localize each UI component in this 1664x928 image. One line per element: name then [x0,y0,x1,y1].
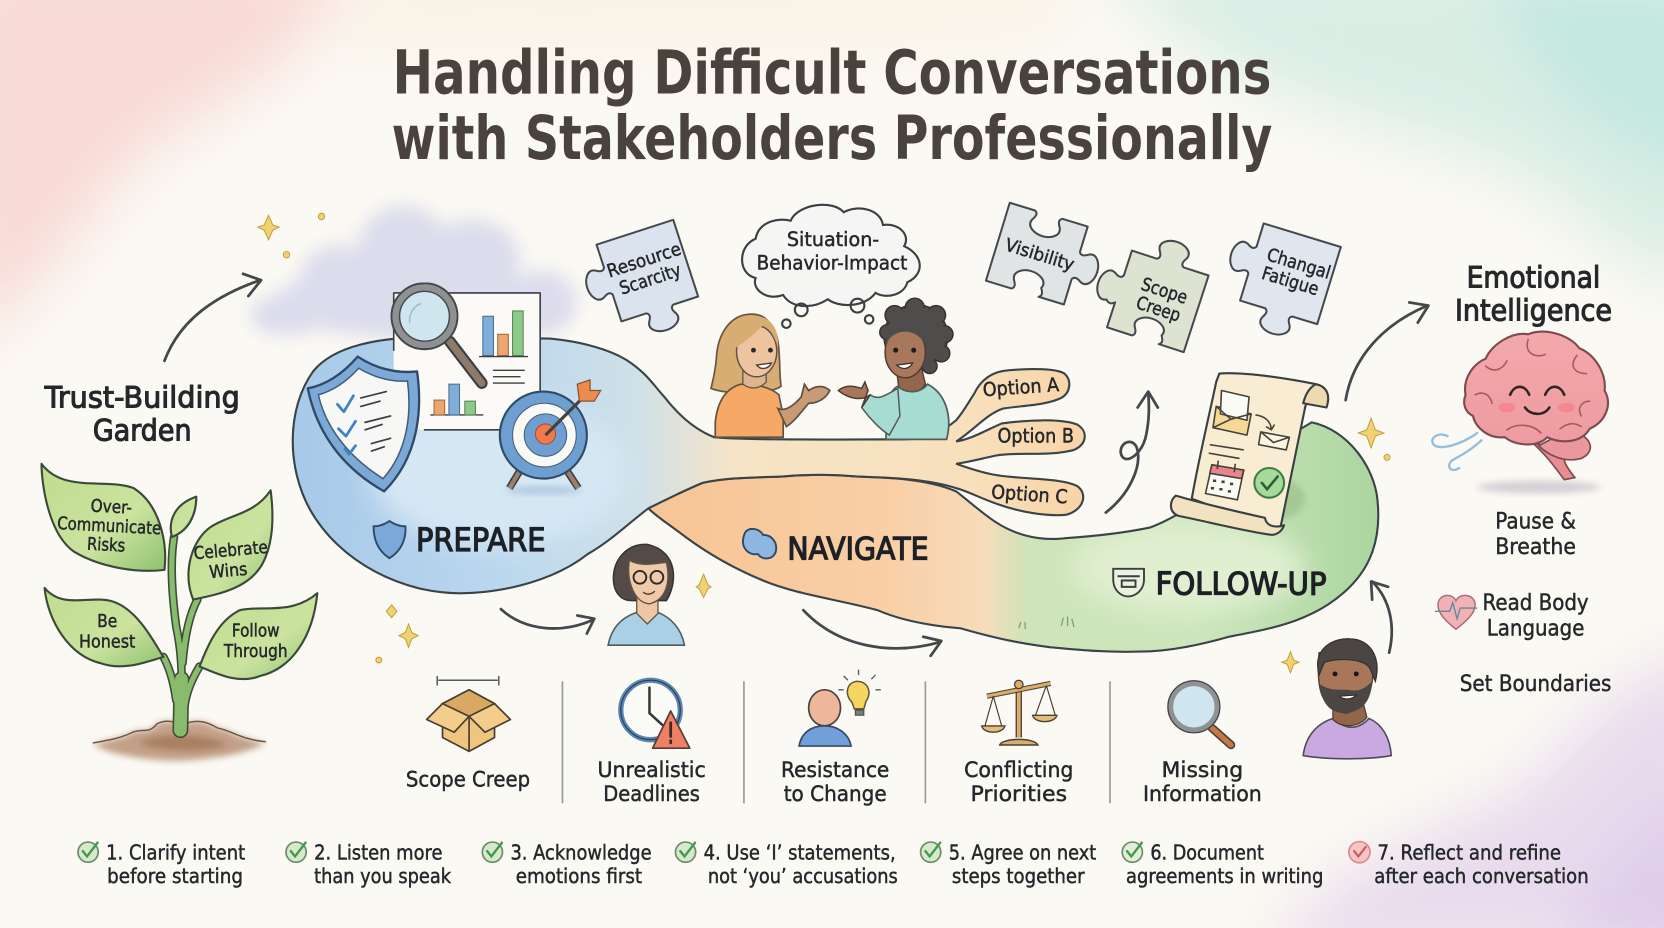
tip 6 [1122,841,1323,888]
heading: trust-building garden [44,381,240,448]
scroll: written follow-up [1171,373,1328,535]
option labels: Option C [990,480,1068,509]
sparkles by prepare bottom [376,574,711,663]
tip 6: 6. Document [1150,841,1264,865]
title: Handling Difficult Conversations [393,38,1271,108]
leaf: be honest [45,588,163,666]
challenge: conflicting priorities [964,680,1073,807]
tip 2: than you speak [314,864,451,888]
icon: heart with pulse [1435,595,1477,629]
label: prepare [374,521,545,559]
stem [163,537,200,730]
icon: smiling brain [1432,332,1608,493]
leaf: be honest: Honest [79,632,135,652]
thought bubble: situation-behavior-impact [742,205,920,328]
divider [561,681,563,803]
divider [743,681,745,803]
tip 5: 5. Agree on next [949,841,1096,865]
person: woman in orange shirt [711,314,830,437]
challenge: scope creep: Scope Creep [406,767,530,792]
breath swirl [1432,433,1481,470]
curly arrow [1106,392,1158,513]
sparkles around follow-up [1358,418,1390,460]
small leaf [171,497,196,537]
person: woman with glasses [608,544,684,645]
tip 7: after each conversation [1374,864,1589,888]
sparkles top left [258,213,325,258]
label: navigate: NAVIGATE [787,531,929,567]
tip 5: steps together [952,864,1085,888]
misty cloud behind prepare [250,206,576,337]
puzzle piece: visibility: Visibility [1002,235,1077,276]
check icon [482,842,502,862]
check icon [78,842,98,862]
tip 5 [921,841,1096,888]
label: follow-up: FOLLOW-UP [1156,566,1327,602]
text: set boundaries: Set Boundaries [1460,671,1611,697]
puzzle piece: changal fatigue: Fatigue [1259,263,1321,300]
puzzle piece: changal fatigue [1212,217,1341,345]
leaf: be honest: Be [97,612,117,632]
leaf: follow through [200,593,317,679]
heading: trust-building garden: Garden [93,413,192,448]
puzzle piece: scope creep: Scope [1138,274,1190,309]
thought bubble: situation-behavior-impact: Situation- [787,228,879,251]
icon: target with arrow [500,380,601,495]
navigate and follow-up river region [648,422,1378,652]
arrow: navigate to challenges [803,610,941,656]
calendar icon [1206,461,1244,500]
challenge: resistance to change [781,670,889,807]
puzzle piece: resource scarcity: Resource [604,239,684,282]
challenge: missing information: Missing [1162,758,1243,783]
document with charts [394,293,540,430]
challenge: resistance to change: Resistance [781,758,889,783]
text: pause and breathe [1495,508,1576,560]
challenge: scope creep [406,676,530,792]
challenge: unrealistic deadlines: Deadlines [603,782,700,807]
plant: trust-building garden [41,464,317,761]
leaf: over-communicate risks: Communicate [57,514,162,539]
check icon [1349,842,1370,863]
text: pause and breathe: Pause & [1495,508,1576,534]
text: read body language: Read Body [1483,590,1589,616]
tip 2: 2. Listen more [314,841,443,865]
puzzle piece: scope creep [1086,223,1215,352]
puzzle piece: scope creep: Creep [1134,293,1183,327]
tip 3: emotions first [516,864,642,888]
person: bearded man in purple [1303,639,1391,759]
puzzle piece: resource scarcity [575,220,705,349]
tip 7 [1349,841,1589,888]
challenge: unrealistic deadlines: Unrealistic [597,758,706,783]
tip 3 [482,841,652,888]
leaf: celebrate wins: Wins [208,560,248,583]
person: curly-haired colleague in teal [838,298,953,439]
heading: emotional intelligence: Emotional [1467,261,1600,296]
tip 4 [675,841,898,888]
title: with Stakeholders Professionally [392,104,1272,174]
tip 1 [78,841,245,888]
leaf: over-communicate risks: Over- [90,497,132,519]
challenge: conflicting priorities: Priorities [970,782,1067,807]
puzzle piece: changal fatigue: Changal [1264,245,1333,284]
leaf: over-communicate risks [41,464,165,571]
leaf: over-communicate risks: Risks [87,535,126,557]
heading: trust-building garden: Trust-Building [44,381,240,416]
label: prepare: PREPARE [416,521,545,559]
arrow: follow-up to emotional intelligence [1346,302,1428,400]
check icon [675,842,696,862]
heading: emotional intelligence: Intelligence [1455,293,1612,328]
divider [924,681,926,803]
challenge: unrealistic deadlines [597,680,706,807]
sparkle near person [1282,652,1299,673]
option labels: Option A [982,373,1060,401]
tip 7: 7. Reflect and refine [1377,841,1561,865]
challenge: missing information: Information [1143,782,1262,807]
icon: shield checklist [308,357,419,491]
option labels [982,373,1074,509]
tip 3: 3. Acknowledge [510,841,652,865]
check icon [1122,842,1142,862]
thought bubble: situation-behavior-impact: Behavior-Impact [757,252,908,275]
tip 1: before starting [107,864,243,888]
check icon [286,842,306,862]
tip 2 [286,841,451,888]
soil mound [93,721,265,761]
challenge: missing information [1143,681,1262,807]
arrow: garden to prepare [164,274,261,361]
puzzle piece: visibility [986,203,1109,311]
puzzle piece: resource scarcity: Scarcity [617,260,684,300]
arrow: prepare to challenges [501,609,594,634]
envelope and mail icons [1209,391,1289,458]
icon: magnifying glass [392,283,482,383]
title [392,38,1272,174]
prepare river region with option branches [293,337,1085,593]
tip 1: 1. Clarify intent [106,841,245,865]
divider [1109,681,1111,803]
challenge: conflicting priorities: Conflicting [964,758,1073,783]
leaf: celebrate wins: Celebrate [193,538,269,564]
text: read body language [1483,590,1589,642]
tip 4: 4. Use ‘I’ statements, [704,841,896,865]
challenge: resistance to change: to Change [784,782,887,807]
check badge [1254,468,1284,498]
arrow: person to follow-up [1371,582,1392,653]
leaf: follow through: Follow [232,622,280,642]
text: read body language: Language [1487,616,1584,642]
leaf: celebrate wins [189,490,272,600]
tip 6: agreements in writing [1126,864,1323,888]
label: navigate [743,529,929,567]
text: pause and breathe: Breathe [1495,534,1576,560]
check icon [921,842,941,862]
option labels: Option B [998,425,1074,448]
tip 4: not ‘you’ accusations [708,864,898,888]
heading: emotional intelligence [1455,261,1612,328]
leaf: follow through: Through [223,642,288,662]
